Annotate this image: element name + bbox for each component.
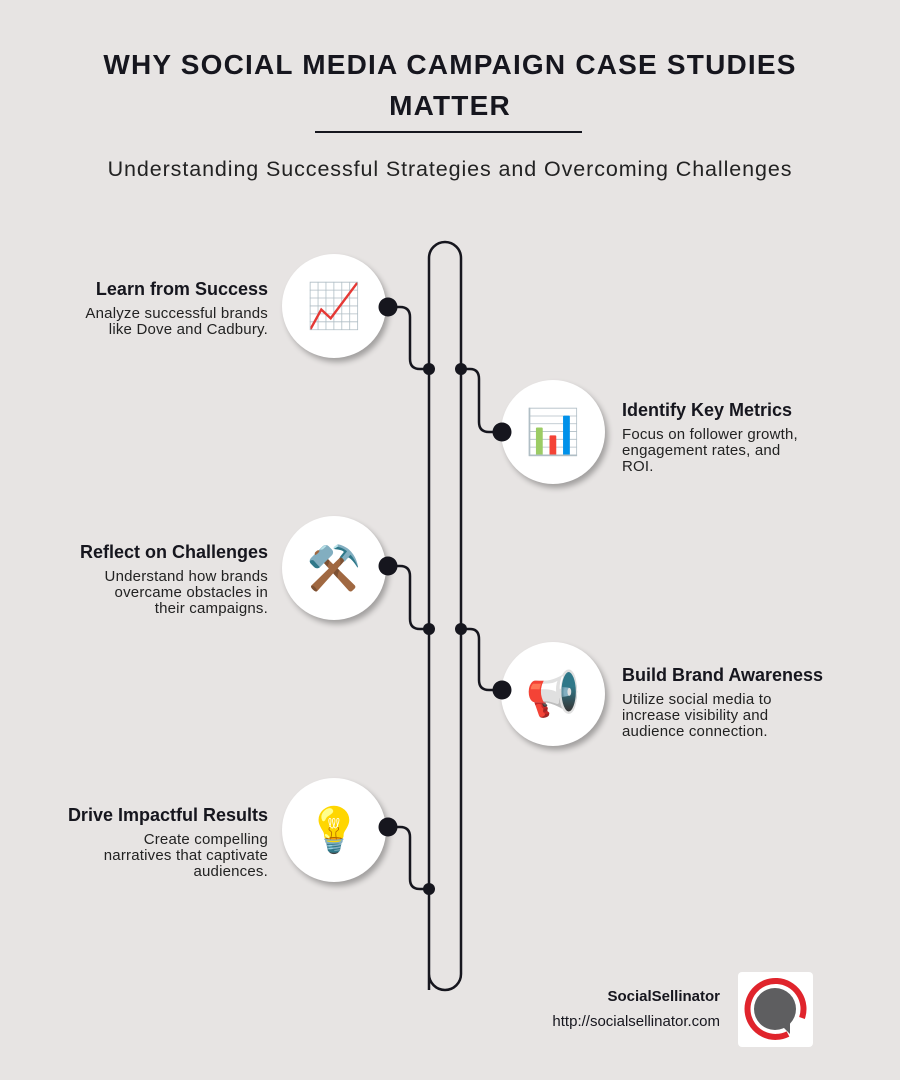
icon circle: chart up	[282, 254, 386, 358]
text: identify key metrics: Focus on follower growth,	[622, 426, 798, 443]
text: drive impactful results: Create compelling	[144, 831, 268, 848]
text: identify key metrics: engagement rates, and	[622, 442, 780, 459]
subtitle: Understanding Successful Strategies and Overcoming Challenges	[108, 157, 792, 181]
text: build brand awareness: Utilize social media to	[622, 691, 772, 708]
title: WHY SOCIAL MEDIA CAMPAIGN CASE STUDIES MATTER	[103, 49, 797, 121]
text: reflect on challenges: Understand how brands	[105, 568, 268, 585]
icon circle: tools: ⚒️	[307, 544, 361, 593]
icon circle: light bulb: 💡	[307, 806, 361, 855]
text: drive impactful results: Drive Impactful Results	[68, 805, 268, 825]
footer brand	[552, 988, 720, 1030]
footer brand: http://socialsellinator.com	[552, 1013, 720, 1030]
text: reflect on challenges: their campaigns.	[155, 600, 268, 617]
icon circle: megaphone: 📢	[526, 670, 580, 719]
footer brand: SocialSellinator	[607, 988, 720, 1005]
icon circle: tools	[282, 516, 386, 620]
logo	[738, 972, 813, 1047]
icon circle: bar chart	[501, 380, 605, 484]
text: learn from success: like Dove and Cadbury.	[109, 321, 268, 338]
text: build brand awareness	[622, 665, 823, 740]
text: reflect on challenges: overcame obstacles in	[115, 584, 268, 601]
text: identify key metrics: Identify Key Metrics	[622, 400, 792, 420]
text: drive impactful results: narratives that captivate	[104, 847, 268, 864]
icon circle: chart up: 📈	[307, 282, 361, 331]
text: build brand awareness: Build Brand Awareness	[622, 665, 823, 685]
text: drive impactful results: audiences.	[193, 863, 268, 880]
text: identify key metrics: ROI.	[622, 458, 654, 475]
text: learn from success	[85, 279, 268, 338]
icon circle: light bulb	[282, 778, 386, 882]
text: reflect on challenges	[80, 542, 268, 617]
text: drive impactful results	[68, 805, 268, 880]
text: build brand awareness: audience connection.	[622, 723, 768, 740]
text: reflect on challenges: Reflect on Challenges	[80, 542, 268, 562]
icon circle: megaphone	[501, 642, 605, 746]
icon circle: bar chart: 📊	[526, 408, 580, 457]
text: identify key metrics	[622, 400, 798, 475]
text: learn from success: Learn from Success	[96, 279, 268, 299]
text: build brand awareness: increase visibility and	[622, 707, 768, 724]
text: learn from success: Analyze successful brands	[85, 305, 268, 322]
